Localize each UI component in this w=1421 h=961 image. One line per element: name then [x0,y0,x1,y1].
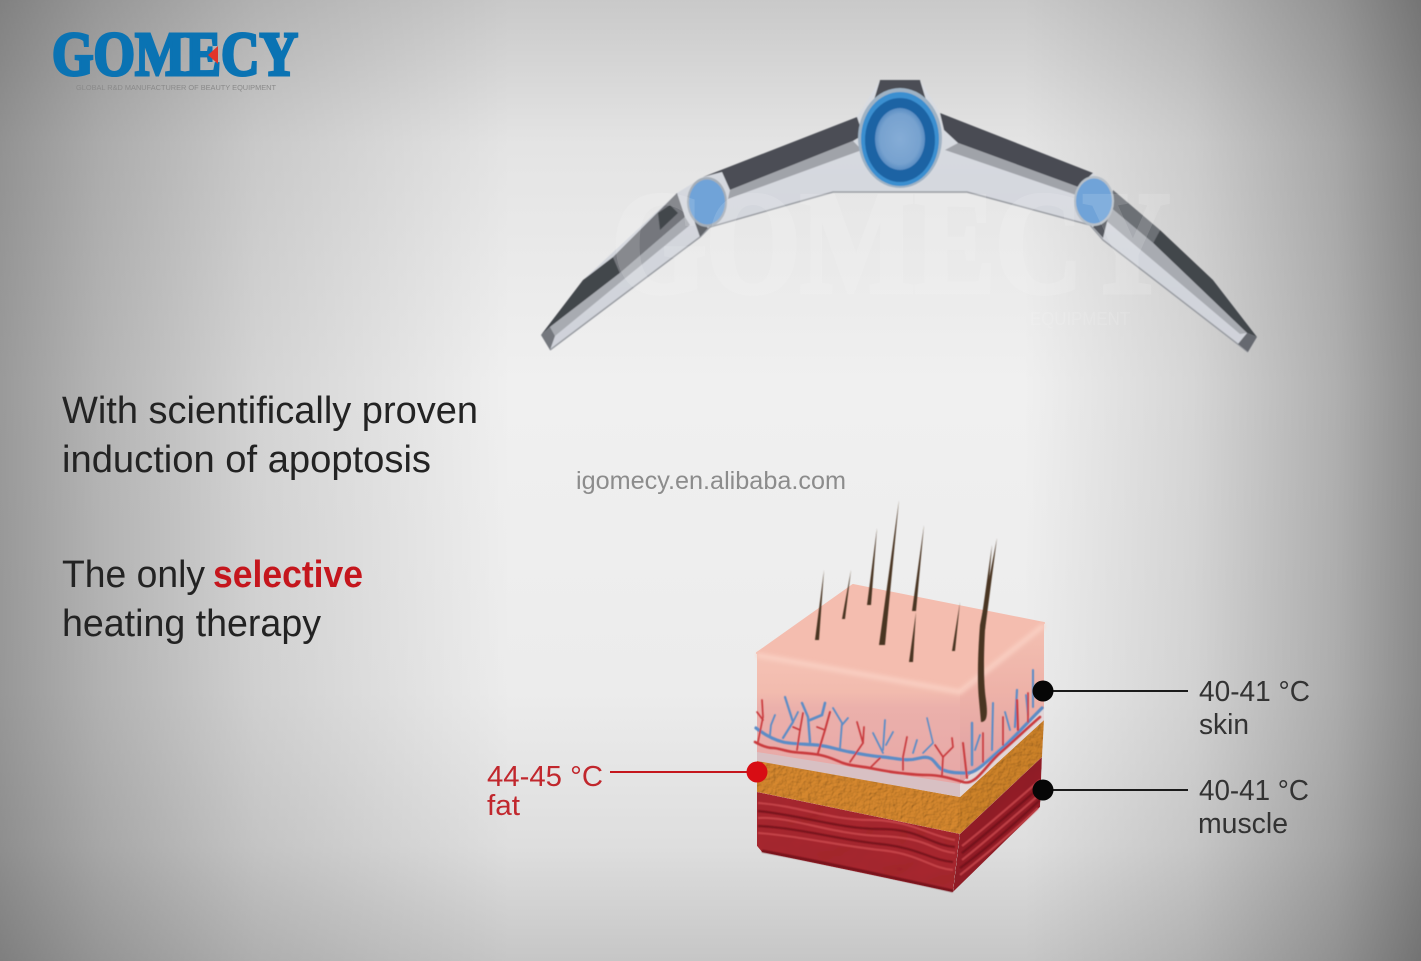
hairs [815,500,997,722]
left arm dark band [703,117,863,190]
blood vessels [755,670,1042,783]
device: applicator arch [541,80,1257,352]
text: apoptosis statement: With scientifically proven [62,390,478,432]
text: selective heating: selective [213,554,363,596]
callout: fat temperature [487,761,768,822]
central lens [858,88,942,188]
right lens [1074,176,1114,226]
watermark: GOMECY [612,162,1170,324]
left arm mid strip [728,141,862,199]
text: selective heating: heating therapy [62,603,321,645]
veins [756,670,1042,773]
epidermis edge highlight [757,625,1044,692]
callout: muscle temperature: muscle [1198,808,1288,840]
logo tagline: GLOBAL R&D MANUFACTURER OF BEAUTY EQUIPMENT [76,85,277,92]
muscle layer [757,756,1042,892]
text: selective heating [62,554,363,645]
callout: skin temperature: 40-41 °C [1199,676,1310,708]
arteries [755,693,1040,783]
logo: GOMECY: GOMECY [52,21,298,89]
device lower edge [550,192,1248,352]
callout: skin temperature: skin [1199,709,1249,741]
website watermark: igomecy.en.alibaba.com [576,467,846,495]
text: apoptosis statement: induction of apoptosis [62,439,431,481]
callout: muscle temperature: 40-41 °C [1199,775,1309,807]
fat layer [757,720,1044,834]
text: apoptosis statement [62,390,478,481]
connective layer [757,708,1044,797]
skin cross-section cube [755,500,1044,892]
logo accent: red triangle [208,46,218,64]
right tip bands [1093,190,1257,352]
text: selective heating: The only [62,554,205,596]
right arm dark band [940,113,1093,187]
epidermis left face [757,653,960,784]
left tip bands [541,193,708,350]
callout: skin temperature [1032,676,1310,741]
device body [541,80,1257,352]
epidermis right face [960,623,1044,784]
top notch [874,80,926,100]
callout: fat temperature: 44-45 °C [487,761,603,793]
epidermis top face [757,585,1044,690]
right arm mid strip [945,143,1078,195]
left lens [687,177,727,227]
watermark tagline: EQUIPMENT [1030,309,1130,329]
callout: muscle temperature [1032,775,1309,840]
callout: fat temperature: fat [487,790,520,822]
